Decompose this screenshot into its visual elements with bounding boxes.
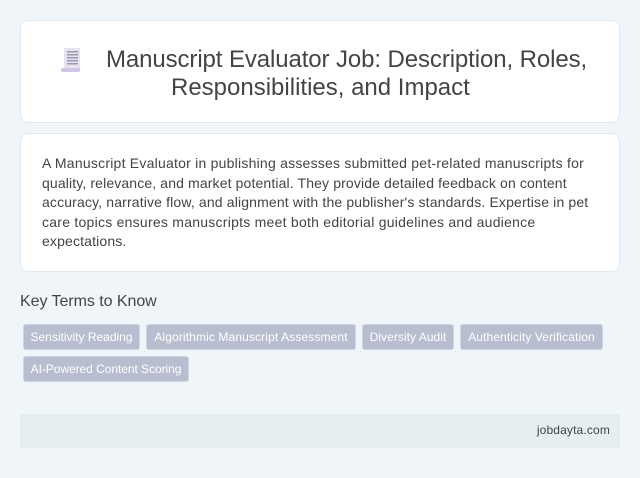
title: Manuscript Evaluator Job: Description, Roles, (106, 46, 587, 73)
footer bar (20, 414, 620, 448)
tag list (23, 324, 603, 382)
icon: manuscript document (61, 48, 80, 72)
description text: A Manuscript Evaluator in publishing assesses submitted pet-related manuscripts for (42, 155, 584, 171)
tag: ai-powered content scoring: AI-Powered Content Scoring (31, 362, 181, 376)
tag: authenticity verification: Authenticity Verification (468, 330, 595, 344)
description text: quality, relevance, and market potential. They provide detailed feedback on content (42, 174, 567, 190)
heading: key terms: Key Terms to Know (20, 293, 157, 310)
description text: accuracy, narrative flow, and alignment with the publisher's standards. Expertise in pet (42, 194, 588, 210)
description text: expectations. (42, 233, 126, 249)
panel: description card (20, 133, 620, 272)
panel: header card (20, 20, 620, 123)
tag: diversity audit: Diversity Audit (370, 330, 446, 344)
tag: authenticity verification (460, 324, 603, 350)
title: Responsibilities, and Impact (171, 74, 470, 101)
tag: sensitivity reading: Sensitivity Reading (30, 330, 133, 344)
description text (42, 155, 588, 249)
tag: sensitivity reading (23, 324, 140, 350)
tag: diversity audit (362, 324, 454, 350)
footer source text: jobdayta.com (537, 423, 610, 437)
tag: ai-powered content scoring (23, 356, 189, 382)
title (106, 46, 587, 101)
tag: algorithmic manuscript assessment: Algorithmic Manuscript Assessment (154, 330, 348, 344)
description text: care topics ensures manuscripts meet both editorial guidelines and audience (42, 214, 535, 230)
tag: algorithmic manuscript assessment (146, 324, 356, 350)
